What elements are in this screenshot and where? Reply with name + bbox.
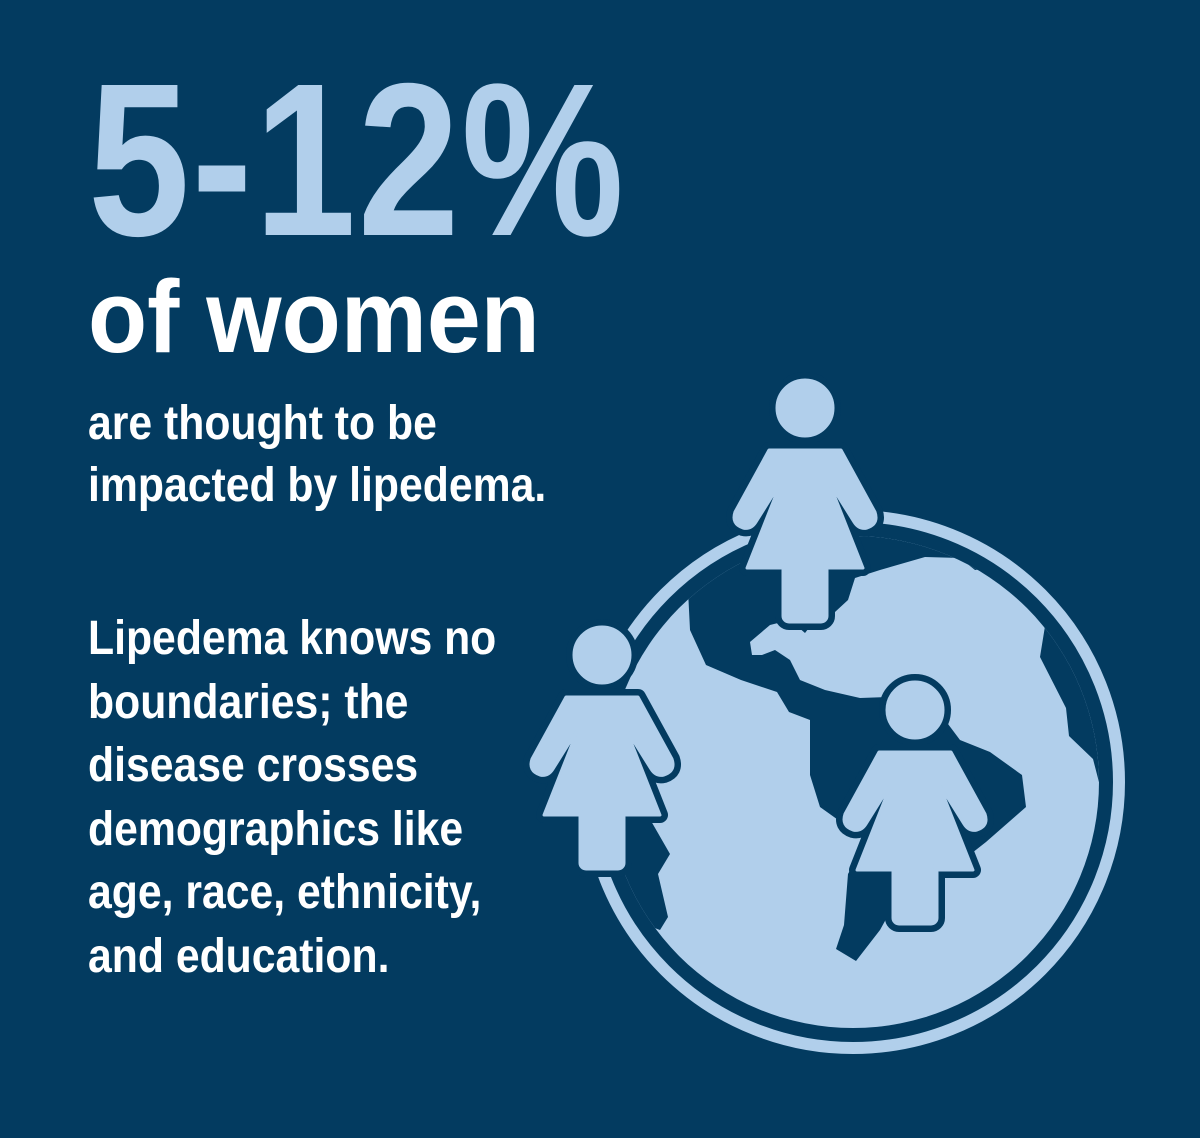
illustration: globe with women <box>530 378 1125 1054</box>
text block: boundaries statement: age, race, ethnicity, <box>88 866 481 919</box>
text block: boundaries statement: boundaries; the <box>88 676 408 729</box>
icon: woman right <box>844 682 986 924</box>
icon: woman left <box>531 627 673 869</box>
text block: impacted statement <box>88 397 546 512</box>
text block: boundaries statement <box>88 612 496 983</box>
text block: boundaries statement: and education. <box>88 930 389 983</box>
text block: boundaries statement: demographics like <box>88 803 463 856</box>
text block: impacted statement: are thought to be <box>88 397 437 450</box>
icon: woman top <box>734 380 876 622</box>
text block: boundaries statement: Lipedema knows no <box>88 612 496 665</box>
subheadline: of women: of women <box>88 259 540 374</box>
globe <box>580 500 1140 1048</box>
text block: boundaries statement: disease crosses <box>88 739 418 792</box>
headline: 5-12%: 5-12% <box>88 39 626 282</box>
text block: impacted statement: impacted by lipedema. <box>88 459 546 512</box>
